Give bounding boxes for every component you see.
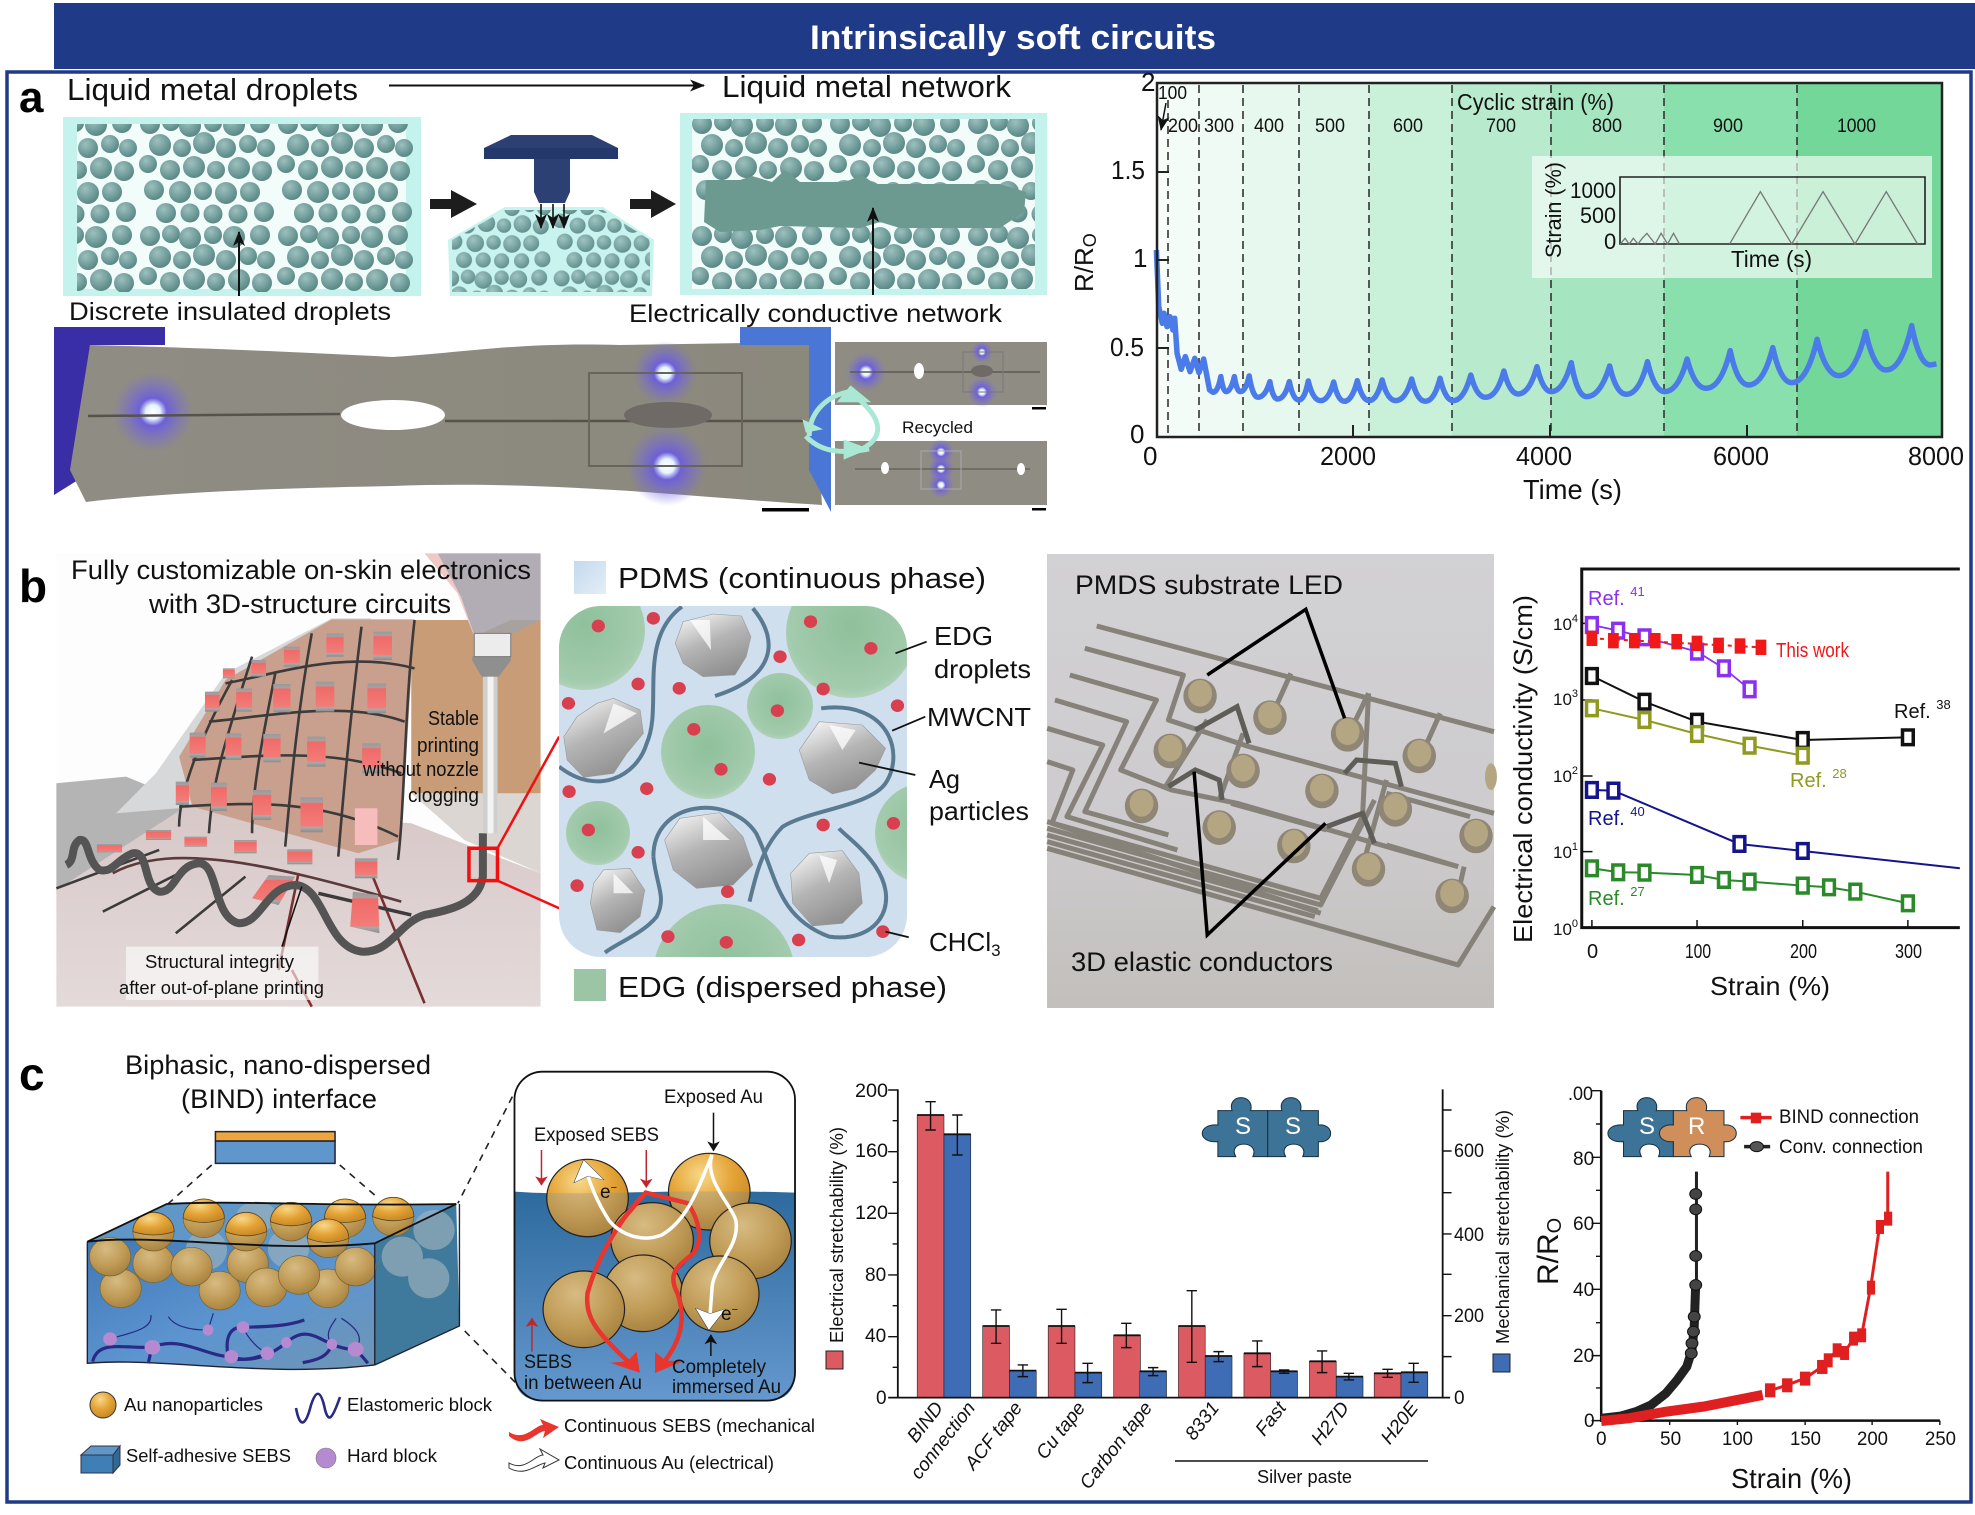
caption: electrically conductive network: Electrically conductive network: [629, 300, 1003, 328]
strain labels: 600: [1393, 116, 1423, 137]
puzzle letters: [1639, 1113, 1705, 1140]
series labels: Ref.: [1588, 888, 1625, 910]
arrow: 100 strain marker: [1161, 103, 1166, 130]
note: structural integrity: [119, 952, 324, 998]
heading: on-skin electronics: with 3D-structure circuits: [148, 589, 451, 619]
axes: [888, 1089, 1450, 1398]
category labels: H27D: [1307, 1398, 1354, 1449]
strain labels: 100: [1158, 83, 1187, 103]
inset: SEBS and Au percolation: e: [721, 1304, 732, 1325]
tick labels: 4: [1572, 613, 1578, 625]
legend: materials: Au nanoparticles: [124, 1394, 263, 1415]
heading: BIND interface: [125, 1050, 431, 1114]
puzzle letters: S: [1639, 1113, 1655, 1140]
inset: strain profile: 0: [1604, 229, 1616, 254]
note: stable printing: without nozzle: [362, 759, 479, 781]
series Ref 38: [1587, 669, 1913, 747]
inset: SEBS and Au percolation: e: [600, 1182, 611, 1203]
strain labels: 700: [1486, 116, 1516, 137]
tick labels: 3: [1572, 688, 1578, 700]
category labels: connection: [907, 1398, 980, 1484]
polymer network: [93, 1313, 368, 1363]
printed circuit grid: [56, 620, 425, 1007]
category labels: 8331: [1181, 1398, 1224, 1444]
axis tick labels: 0: [1130, 419, 1144, 449]
left tick labels: 200: [855, 1081, 888, 1102]
legend: materials: Self-adhesive SEBS: [126, 1445, 291, 1466]
note: stable printing: printing: [417, 735, 479, 757]
tick labels: 1: [1572, 841, 1578, 853]
series Ref 28: [1587, 701, 1808, 763]
series labels: [1588, 584, 1951, 910]
photo: stretched circuit: [54, 327, 831, 512]
category labels: [903, 1398, 1423, 1493]
tick labels: 2: [1572, 765, 1578, 777]
chloroform droplets: [562, 612, 904, 949]
left tick labels: [855, 1081, 888, 1409]
strain labels: 800: [1592, 116, 1622, 137]
legend markers: [1740, 1113, 1772, 1152]
strain labels: [1158, 83, 1876, 137]
heading: BIND interface: (BIND) interface: [181, 1084, 377, 1114]
tick labels: 100: [1685, 941, 1711, 963]
category labels: Carbon tape: [1076, 1398, 1157, 1493]
icon: recycling arrows: [802, 385, 878, 460]
series labels: Ref.: [1790, 770, 1827, 792]
note: structural integrity: Structural integrity: [145, 952, 294, 972]
legend text: BIND connection: [1779, 1107, 1919, 1128]
tick labels: 80: [1573, 1149, 1594, 1170]
droplet box: [63, 117, 421, 296]
pointer lines: [1194, 609, 1345, 935]
series labels: Ref.: [1588, 808, 1625, 830]
inset: SEBS and Au percolation: immersed Au: [672, 1377, 781, 1398]
panel c: [19, 1048, 1956, 1494]
inset: strain profile: 500: [1580, 203, 1616, 228]
inset: strain profile: [1532, 156, 1932, 278]
inset: SEBS and Au percolation: −: [611, 1182, 617, 1194]
photo: printed LED array: PMDS substrate LED: [1075, 570, 1343, 600]
category labels: BIND: [903, 1398, 948, 1447]
axis title: R/R0: R/R: [1069, 247, 1099, 292]
tick labels: [1568, 1084, 1956, 1450]
legend: pathways: [509, 1415, 815, 1473]
puzzle letters: S: [1285, 1113, 1301, 1140]
axis tick labels: 8000: [1908, 441, 1964, 471]
inset: SEBS and Au percolation: Completely: [672, 1357, 766, 1378]
axis title: electrical conductivity: Electrical conductivity (S/cm): [1508, 595, 1538, 943]
puzzle letters: [1235, 1113, 1301, 1140]
tick labels: 0: [1596, 1429, 1607, 1450]
panel letter c: c: [19, 1048, 45, 1100]
SEBS block: [87, 1203, 456, 1246]
axis tick labels: 6000: [1713, 441, 1769, 471]
carbon nanotubes: [559, 607, 893, 953]
series Ref 27: [1587, 861, 1913, 911]
diagram labels: Ag: [929, 764, 960, 794]
mechanical pathway: [587, 1193, 699, 1368]
legend: materials: Elastomeric block: [347, 1394, 493, 1415]
inset: SEBS and Au percolation: Exposed SEBS: [534, 1125, 659, 1146]
series labels: 41: [1630, 584, 1645, 599]
bars: [917, 1115, 1428, 1398]
tick labels: 150: [1790, 1429, 1821, 1450]
legend: materials: [81, 1392, 493, 1473]
right tick labels: 0: [1454, 1388, 1465, 1409]
tick labels: 50: [1660, 1429, 1681, 1450]
strain labels: Cyclic strain (%): [1457, 89, 1614, 115]
axis tick labels: [1110, 67, 1964, 471]
inset: SEBS and Au percolation: SEBS: [524, 1352, 572, 1373]
category labels: Cu tape: [1032, 1398, 1090, 1464]
puzzle letters: R: [1688, 1113, 1705, 1140]
title banner: [54, 3, 1975, 69]
legend: materials: Hard block: [347, 1445, 438, 1466]
heading: liquid metal network: Liquid metal network: [722, 69, 1011, 104]
tick labels: 0: [1584, 1411, 1595, 1432]
data curve: [1156, 250, 1936, 401]
tick labels: 10: [1553, 767, 1572, 786]
axis tick labels: 2: [1141, 67, 1155, 97]
tick labels: 300: [1895, 941, 1922, 963]
tick labels: 0: [1587, 941, 1598, 963]
tick labels: 10: [1553, 690, 1572, 709]
series Ref 41: [1587, 618, 1755, 697]
chart: conductivity versus strain: [1508, 569, 1960, 1001]
note: stable printing: [362, 708, 479, 807]
category labels: Fast: [1252, 1398, 1291, 1440]
conv. connection curve: [1601, 1172, 1702, 1418]
photo: printed LED array: 3D elastic conductors: [1071, 947, 1333, 977]
chips: [97, 632, 392, 933]
tick labels: [1553, 613, 1922, 963]
photo: recycled small strip: [835, 439, 1047, 510]
illustration: BIND block: [87, 1097, 516, 1383]
right tick labels: 600: [1454, 1141, 1484, 1162]
note: stable printing: clogging: [408, 785, 479, 807]
puzzle letters: S: [1235, 1113, 1251, 1140]
diagram labels: CHCl: [929, 927, 991, 957]
inset: strain profile: 1000: [1570, 178, 1616, 203]
tick labels: 20: [1573, 1346, 1594, 1367]
chart: R/R0 versus time under cyclic strain: [1069, 67, 1964, 505]
note: stable printing: Stable: [428, 708, 479, 730]
tick labels: 200: [1857, 1429, 1888, 1450]
axis title: R/R0: O: [1544, 1218, 1566, 1233]
diagram labels: 3: [991, 941, 1001, 960]
ink microstructure diagram: [559, 606, 927, 957]
left tick labels: 80: [865, 1265, 886, 1286]
category labels: ACF tape: [961, 1398, 1027, 1475]
photo: original small strip: [835, 341, 1047, 410]
axis tick labels: 4000: [1516, 441, 1572, 471]
axis tick labels: 1.5: [1111, 155, 1145, 185]
inset: SEBS and Au percolation: in between Au: [524, 1373, 642, 1394]
tick labels: .00: [1568, 1084, 1593, 1105]
process arrow 2: [630, 190, 676, 218]
title banner: Intrinsically soft circuits: [810, 19, 1216, 57]
tick labels: 200: [1790, 941, 1817, 963]
diagram labels: particles: [929, 796, 1029, 826]
panel a: [19, 69, 1047, 512]
axis title: R/R0: O: [1080, 233, 1100, 247]
axis title: mechanical stretchability: Mechanical stretchability (%): [1493, 1110, 1513, 1344]
strain labels: 200: [1168, 116, 1198, 137]
panel letter a: a: [19, 73, 44, 122]
category labels: H20E: [1377, 1398, 1423, 1449]
tick labels: 10: [1553, 615, 1572, 634]
inset: SEBS and Au percolation: Exposed Au: [664, 1087, 763, 1108]
left tick labels: 0: [876, 1388, 887, 1409]
series labels: 28: [1832, 766, 1847, 781]
axis title: time: Time (s): [1523, 474, 1622, 505]
inset gold particles: [543, 1153, 791, 1348]
surface gold particles: [133, 1197, 414, 1258]
icon: S-S puzzle: [1202, 1098, 1331, 1157]
axis tick labels: 0: [1143, 441, 1157, 471]
chart: R/R0 versus strain for connections: [1532, 1084, 1956, 1494]
axis title: electrical stretchability: Electrical stretchability (%): [827, 1127, 847, 1343]
legend text: Conv. connection: [1779, 1137, 1923, 1158]
tick labels: 250: [1925, 1429, 1956, 1450]
right tick labels: [1454, 1141, 1484, 1409]
silver paste bracket: Silver paste: [1257, 1467, 1352, 1487]
series labels: Ref.: [1588, 588, 1625, 610]
axis title: strain: Strain (%): [1710, 971, 1830, 1001]
leader lines: [859, 642, 927, 937]
photo: printed LED array: [1047, 554, 1497, 1008]
legend text: [1779, 1107, 1923, 1158]
translucent particles: [186, 1202, 455, 1298]
diagram labels: MWCNT: [927, 702, 1031, 732]
printed wavy tube: [66, 833, 483, 952]
series labels: 40: [1630, 804, 1645, 819]
series labels: Ref.: [1894, 701, 1931, 723]
axis title: R/R0: R/R: [1532, 1233, 1565, 1285]
series Ref 40: [1587, 783, 1960, 868]
axis tick labels: 2000: [1320, 441, 1376, 471]
tick labels: 40: [1573, 1280, 1594, 1301]
nozzle: [483, 677, 497, 833]
right tick labels: 400: [1454, 1225, 1484, 1246]
panel b: [19, 553, 1960, 1046]
series labels: 38: [1936, 697, 1951, 712]
process arrow 1: [430, 190, 477, 218]
LED modules: [1125, 679, 1497, 913]
panel letter b: b: [19, 560, 47, 612]
strain labels: 500: [1315, 116, 1345, 137]
left tick labels: 160: [855, 1141, 888, 1162]
series labels: 27: [1630, 884, 1645, 899]
strain labels: 400: [1254, 116, 1284, 137]
right tick labels: 200: [1454, 1306, 1484, 1327]
heading: liquid metal droplets: Liquid metal droplets: [67, 72, 358, 107]
tick labels: 10: [1553, 920, 1572, 939]
heading: BIND interface: Biphasic, nano-dispersed: [125, 1050, 431, 1080]
heading: on-skin electronics: [71, 555, 531, 619]
legend: PDMS: PDMS (continuous phase): [618, 563, 986, 595]
connector stack: [215, 1132, 335, 1163]
axes: [1601, 1091, 1940, 1421]
strain bands: [1157, 83, 1942, 437]
strain labels: 900: [1713, 116, 1743, 137]
inset: strain profile: Strain (%): [1541, 162, 1566, 258]
axes: [1582, 569, 1960, 928]
legend: pathways: Continuous Au (electrical): [564, 1452, 774, 1473]
series labels: This work: [1776, 640, 1850, 662]
inset: SEBS and Au percolation: [514, 1072, 795, 1401]
diagram labels: EDG: [934, 621, 993, 651]
error bars: [925, 1102, 1419, 1383]
axis tick labels: 0.5: [1110, 332, 1144, 362]
strain labels: 1000: [1837, 116, 1876, 137]
legend: pathways: Continuous SEBS (mechanical: [564, 1415, 815, 1436]
press and compressed block: [448, 135, 654, 296]
bar chart: stretchability comparison: [826, 1081, 1513, 1493]
embedded gold particles: [89, 1237, 376, 1310]
diagram labels: [927, 621, 1031, 960]
arrow: droplets to network: [389, 84, 704, 86]
note: structural integrity: after out-of-plane printing: [119, 978, 324, 998]
tick labels: 10: [1553, 843, 1572, 862]
3D arches: [1168, 707, 1401, 843]
silver particles: [559, 607, 904, 953]
left tick labels: 40: [865, 1326, 886, 1347]
network box: [680, 113, 1047, 295]
label: recycled: Recycled: [902, 418, 973, 437]
tick labels: 60: [1573, 1214, 1594, 1235]
pointer arrows: [532, 1113, 713, 1356]
strain labels: 300: [1204, 116, 1234, 137]
diagram labels: droplets: [934, 654, 1031, 684]
heading: on-skin electronics: Fully customizable on-skin electronics: [71, 555, 531, 585]
inset: SEBS and Au percolation: −: [732, 1304, 738, 1316]
illustration: 3D printed on-skin electronics: [56, 553, 559, 1007]
electrical pathway: [585, 1155, 736, 1325]
zoom box and guide lines: [469, 848, 497, 881]
legend: EDG: EDG (dispersed phase): [618, 972, 947, 1004]
inset: strain profile: Time (s): [1731, 246, 1812, 272]
plot frame: [1157, 83, 1942, 437]
axis title: strain: Strain (%): [1731, 1463, 1852, 1494]
left tick labels: 120: [855, 1203, 888, 1224]
BIND connection curve: [1601, 1172, 1892, 1421]
tick labels: 0: [1572, 918, 1578, 930]
axis tick labels: 1: [1133, 243, 1147, 273]
tick labels: 100: [1722, 1429, 1753, 1450]
series this work: [1587, 631, 1766, 655]
icon: S-R puzzle: [1608, 1098, 1736, 1157]
caption: discrete insulated droplets: Discrete insulated droplets: [69, 298, 391, 326]
